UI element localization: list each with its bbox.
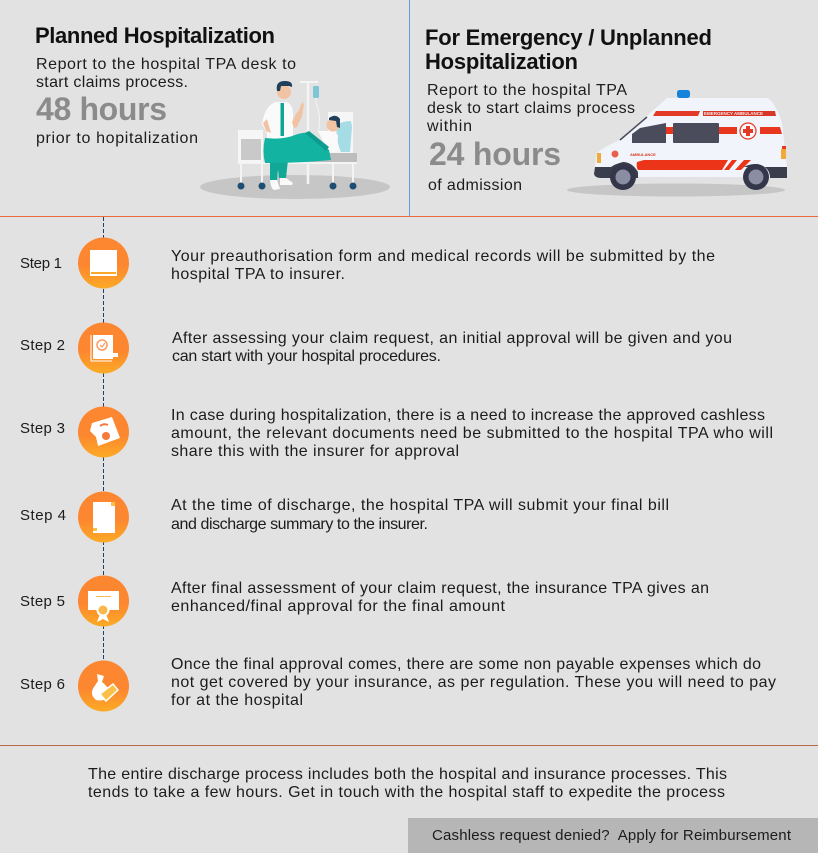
illustration: ambulance [567,90,787,196]
label: step 1: Step 1 [20,255,62,272]
label: step 6: Step 6 [20,676,65,693]
text: discharge process note: tends to take a few hours. Get in touch with the hospital staff to expedite the process [88,784,725,801]
text: step 5 description [171,580,709,615]
text: step 4 description [171,497,669,533]
illustration: doctor and patient in hospital bed [200,81,390,199]
icon: certificate [78,576,129,626]
text: of admission: of admission [428,177,522,194]
callout: reimbursement [408,818,818,853]
step 3 [20,406,773,460]
icon: bill [78,492,129,542]
icon: cash notes [78,406,129,458]
icon: money bag [78,660,129,712]
text: step 3 description: In case during hospitalization, there is a need to increase the approved cashless [171,407,765,424]
text: emergency instructions: Report to the hospital TPA [427,82,627,99]
text: step 4 description: and discharge summary to the insurer. [171,516,428,533]
icon: form [78,238,129,288]
step 1 [20,238,715,288]
step 6 [20,656,776,712]
text: step 6 description: not get covered by your insurance, as per regulation. These you will need to pay [171,674,776,691]
text: planned instructions: start claims process. [36,74,188,91]
text: emergency instructions: desk to start claims process [427,100,635,117]
illustration: ambulance: AMBULANCE [630,152,656,157]
text: discharge process note [88,766,727,801]
connector: dashed timeline [102,217,104,662]
text: step 5 description: After final assessment of your claim request, the insurance TPA gives an [171,580,709,597]
text: discharge process note: The entire discharge process includes both the hospital and insurance processes. This [88,766,727,783]
heading: emergency hospitalization [425,25,712,74]
step 5 [20,576,709,626]
figure: 48 hours: 48 hours [36,91,167,127]
icon: approval document [78,322,129,374]
text: emergency instructions: within [426,118,472,135]
text: step 6 description [171,656,776,709]
text: step 3 description: amount, the relevant documents need be submitted to the hospital TPA who will [171,425,773,442]
text: planned instructions: Report to the hospital TPA desk to [36,56,296,73]
text: step 1 description: Your preauthorisation form and medical records will be submitted by the [171,248,715,265]
panel: emergency hospitalization [425,25,787,196]
text: step 1 description: hospital TPA to insurer. [171,266,345,283]
label: step 2: Step 2 [20,337,65,354]
text: step 2 description [172,330,732,365]
text: prior to hospitalization: prior to hopitalization [36,130,198,147]
text: step 6 description: Once the final approval comes, there are some non payable expenses which do [171,656,761,673]
text: step 2 description: After assessing your claim request, an initial approval will be given and you [172,330,732,347]
heading: planned hospitalization: Planned Hospitalization [35,23,275,48]
callout: reimbursement: Cashless request denied? Apply for Reimbursement [432,827,792,844]
label: step 4: Step 4 [20,507,66,524]
text: step 3 description: share this with the insurer for approval [171,443,459,460]
heading: emergency hospitalization: For Emergency / Unplanned [425,25,712,50]
text: step 4 description: At the time of discharge, the hospital TPA will submit your final bill [171,497,669,514]
step 2 [20,322,732,374]
panel: planned hospitalization [35,23,390,199]
illustration: ambulance: EMERGENCY AMBULANCE [704,111,763,116]
label: step 3: Step 3 [20,420,65,437]
text: step 1 description [171,248,715,283]
step 4 [20,492,669,542]
text: emergency instructions [426,82,635,135]
text: step 6 description: for at the hospital [171,692,303,709]
text: step 2 description: can start with your hospital procedures. [172,348,441,365]
figure: 24 hours: 24 hours [429,136,561,172]
text: step 5 description: enhanced/final approval for the final amount [171,598,506,615]
label: step 5: Step 5 [20,593,65,610]
text: planned instructions [36,56,296,91]
heading: emergency hospitalization: Hospitalization [425,49,578,74]
text: step 3 description [171,407,773,460]
